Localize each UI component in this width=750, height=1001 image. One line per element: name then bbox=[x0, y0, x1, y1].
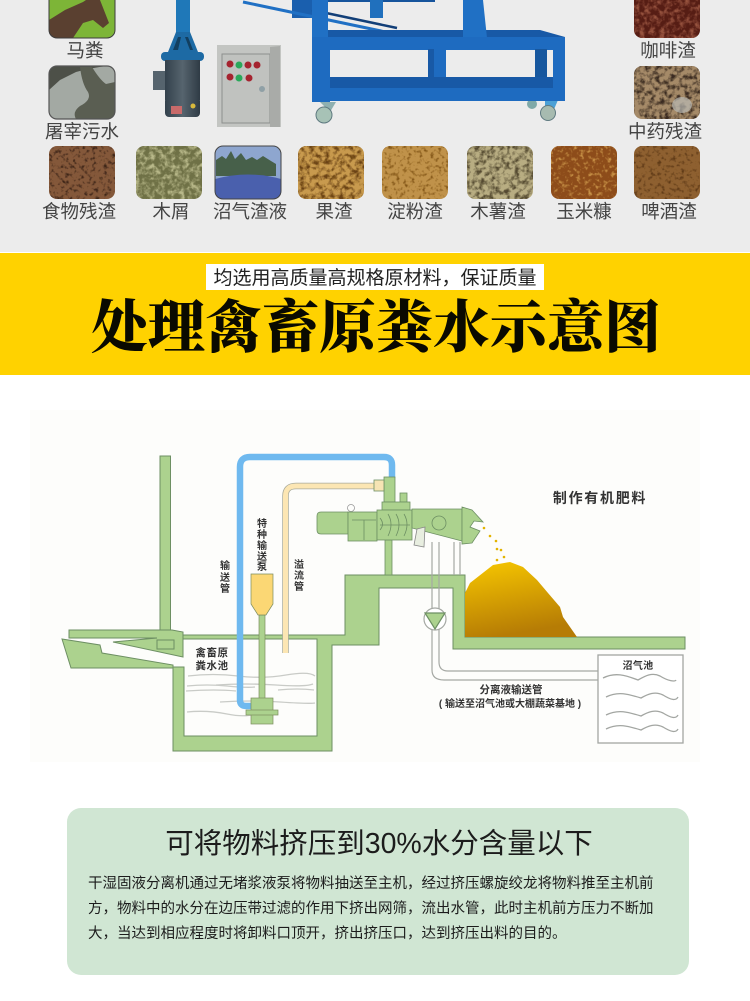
panel: description card bbox=[67, 808, 689, 975]
diagram labels: 管 bbox=[220, 582, 230, 595]
label: herbal residue: 中药残渣 bbox=[628, 121, 702, 142]
special pump bbox=[246, 574, 278, 724]
label: corn bran: 玉米糠 bbox=[556, 201, 612, 222]
label: fruit pomace: 果渣 bbox=[315, 201, 353, 222]
water waves bbox=[186, 673, 315, 716]
label: biogas residue: 沼气渣液 bbox=[213, 201, 287, 222]
thumbnail: cassava residue bbox=[467, 146, 533, 199]
diagram labels: 输 bbox=[220, 559, 230, 572]
thumbnail: sawdust bbox=[136, 146, 202, 199]
label: sawdust: 木屑 bbox=[152, 201, 190, 222]
thumbnail: herbal residue bbox=[634, 66, 700, 119]
card body text bbox=[88, 874, 654, 942]
diagram labels: 分离液输送管 bbox=[480, 683, 542, 696]
diagram labels: 特 bbox=[257, 517, 267, 530]
thumbnail: biogas residue bbox=[215, 146, 281, 199]
diagram labels: 种 bbox=[257, 528, 267, 541]
label: coffee grounds: 咖啡渣 bbox=[640, 40, 696, 61]
label: slaughter wastewater: 屠宰污水 bbox=[45, 121, 119, 142]
banner: yellow title band bbox=[0, 253, 750, 375]
thumbnail: food residue bbox=[49, 146, 115, 199]
thumbnail: slaughter wastewater bbox=[49, 66, 115, 119]
diagram labels: 送 bbox=[220, 571, 230, 584]
wheels bbox=[316, 99, 558, 123]
diagram labels: 管 bbox=[294, 580, 304, 593]
icon: separator machine frame bbox=[243, 0, 565, 123]
card heading: 可将物料挤压到30%水分含量以下 bbox=[165, 828, 593, 860]
diagram labels bbox=[196, 490, 653, 710]
card body text: 方，物料中的水分在边压带过滤的作用下挤出网筛，流出水管，此时主机前方压力不断加 bbox=[88, 900, 654, 917]
conveying pipe bbox=[240, 457, 392, 706]
thumbnail: coffee grounds bbox=[634, 0, 700, 38]
panel: raw materials background bbox=[0, 0, 750, 252]
diagram labels: 溢 bbox=[294, 558, 304, 571]
overflow pipe bbox=[286, 486, 378, 653]
falling fertilizer dots bbox=[483, 527, 505, 561]
diagram labels: 泵 bbox=[257, 561, 267, 573]
label: brewery residue: 啤酒渣 bbox=[641, 201, 697, 222]
card body text: 大，当达到相应程度时将卸料口顶开，挤出挤压口，达到挤压出料的目的。 bbox=[88, 924, 566, 942]
title: 处理禽畜原粪水示意图 bbox=[91, 296, 661, 360]
icon: pump motor bbox=[153, 0, 204, 117]
thumbnail: corn bran bbox=[551, 146, 617, 199]
card body text: 干湿固液分离机通过无堵浆液泵将物料抽送至主机，经过挤压螺旋绞龙将物料推至主机前 bbox=[88, 874, 654, 892]
thumbnail: horse manure bbox=[49, 0, 115, 38]
subtitle tag: 均选用高质量高规格原材料，保证质量 bbox=[213, 267, 537, 289]
diagram labels: 送 bbox=[257, 550, 267, 563]
biogas tank bbox=[598, 655, 683, 743]
thumbnail: fruit pomace bbox=[298, 146, 364, 199]
diagram labels: 流 bbox=[294, 569, 304, 582]
label: starch residue: 淀粉渣 bbox=[387, 201, 443, 222]
fertilizer pile bbox=[465, 562, 577, 637]
diagram labels: 沼气池 bbox=[623, 659, 653, 672]
diagram labels: 制作有机肥料 bbox=[553, 490, 647, 506]
thumbnail: starch residue bbox=[382, 146, 448, 199]
diagram labels: 粪水池 bbox=[196, 659, 228, 672]
thumbnail: brewery residue bbox=[634, 146, 700, 199]
label: horse manure: 马粪 bbox=[66, 40, 104, 61]
panel: process diagram bbox=[30, 410, 700, 762]
label: food residue: 食物残渣 bbox=[42, 201, 116, 222]
separated liquid pipe and valve bbox=[424, 542, 598, 680]
diagram labels: 禽畜原 bbox=[196, 646, 228, 659]
icon: control box bbox=[217, 45, 281, 127]
concrete structure bbox=[62, 456, 685, 751]
diagram labels: ( 输送至沼气池或大棚蔬菜基地 ) bbox=[439, 697, 581, 710]
label: cassava residue: 木薯渣 bbox=[470, 201, 526, 222]
separator machine bbox=[317, 477, 483, 575]
diagram labels: 输 bbox=[257, 539, 267, 552]
